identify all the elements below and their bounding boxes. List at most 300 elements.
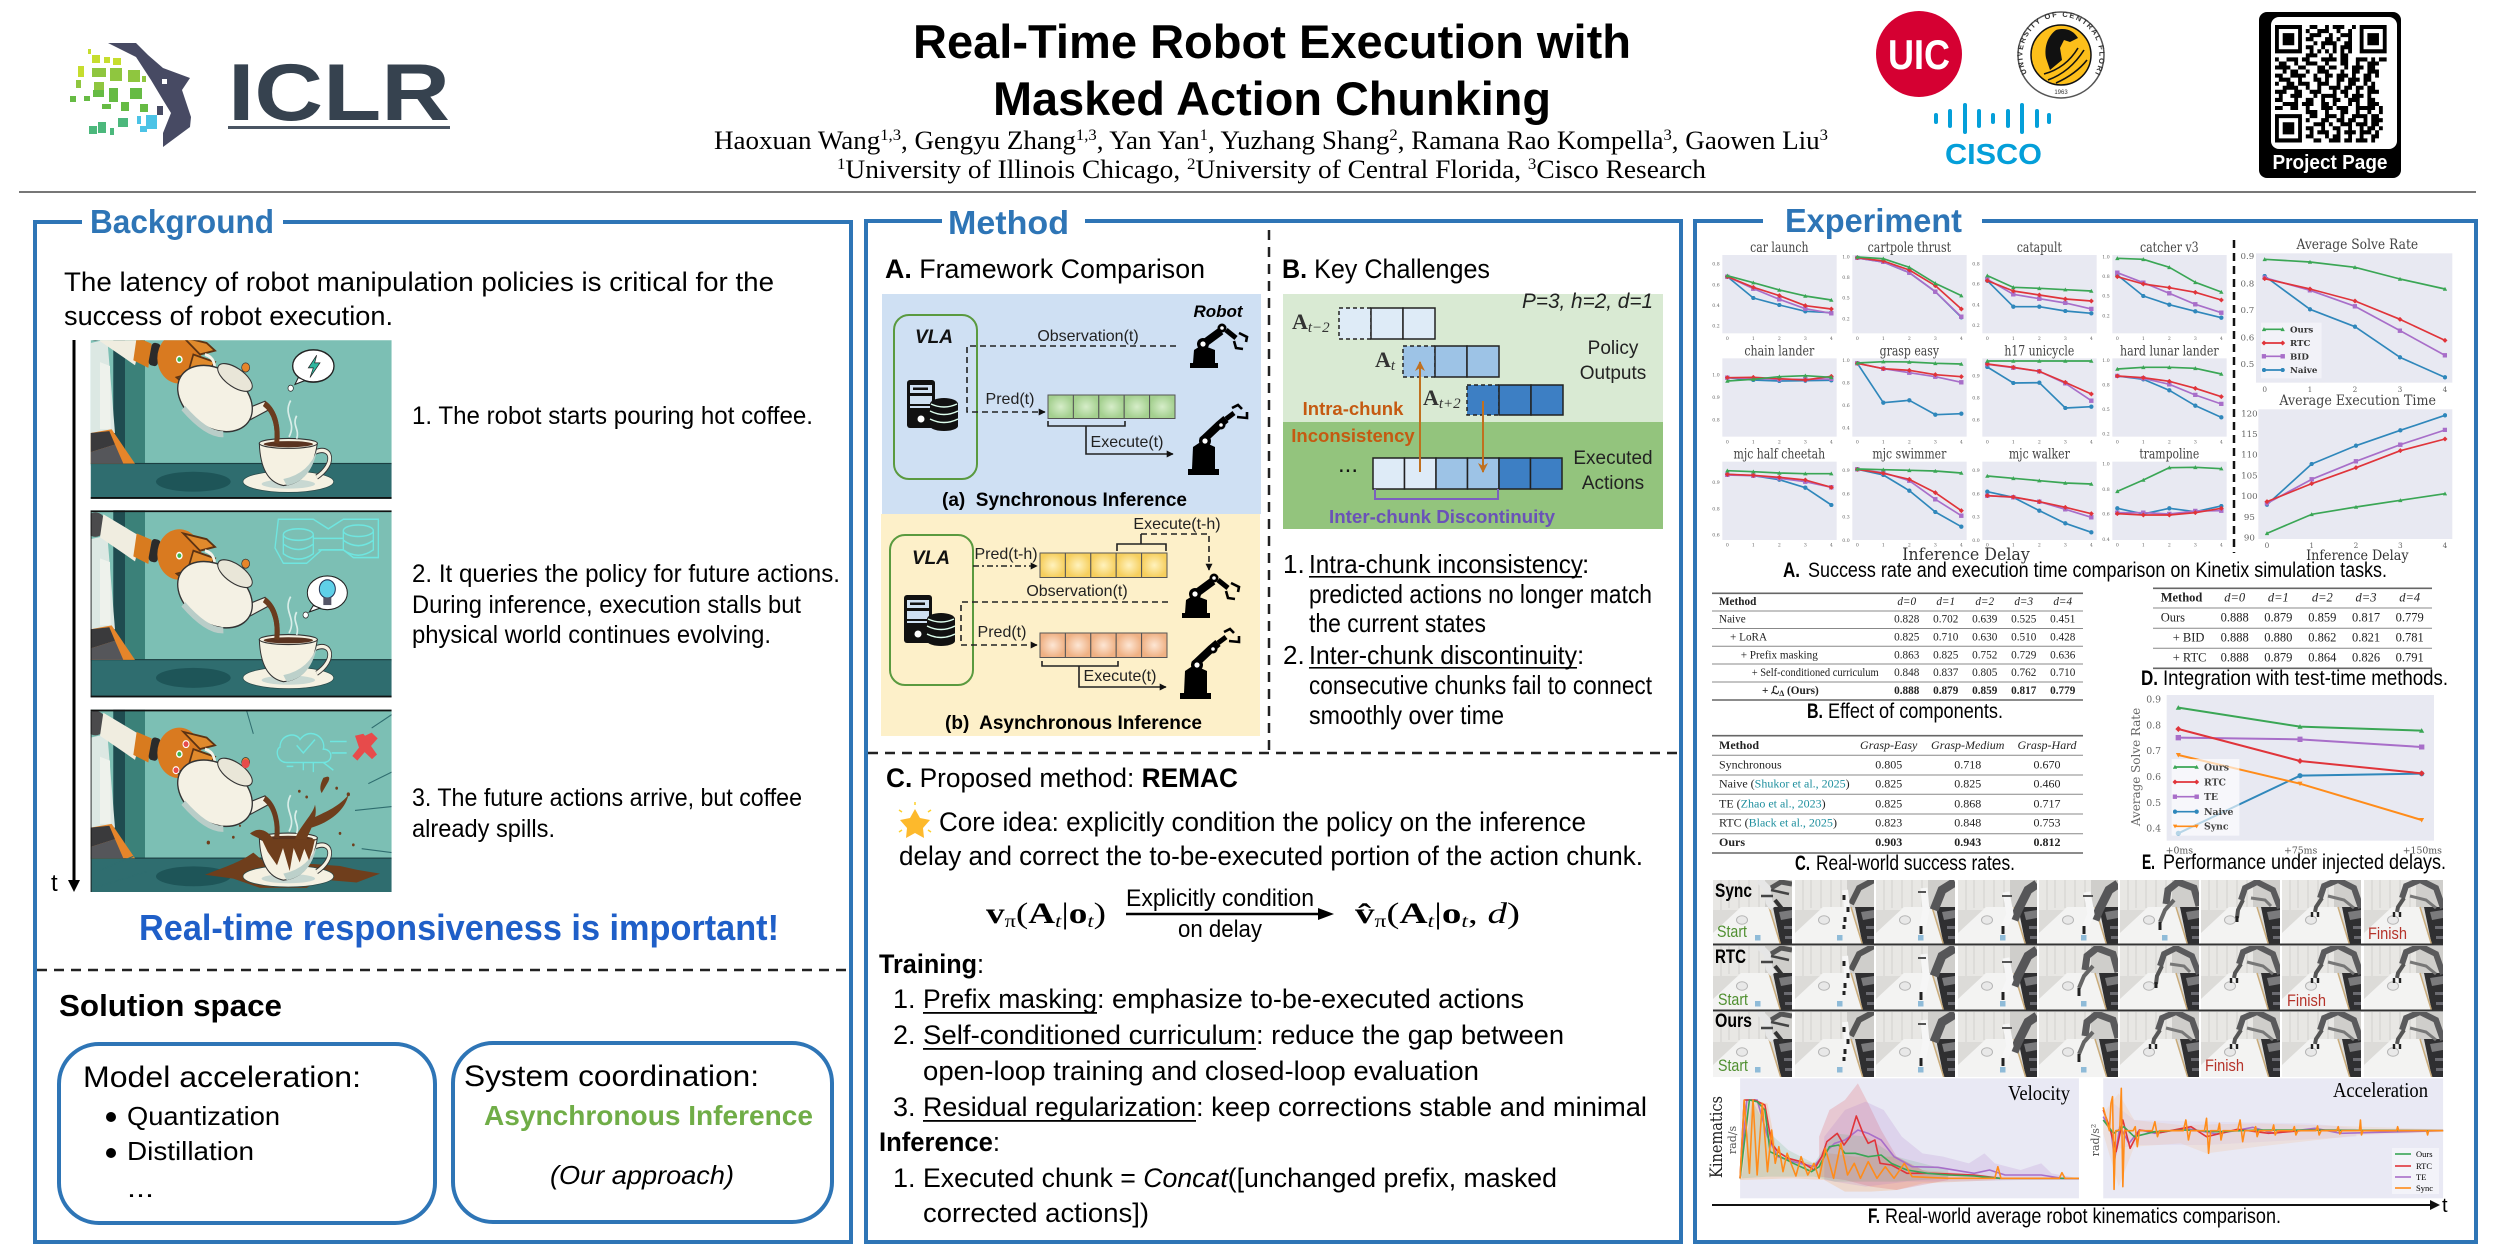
table: real-world success rates: 0.460 xyxy=(2034,777,2060,791)
table: effect of components: 0.837 xyxy=(1933,667,1959,679)
diagram: key challenges: t+2 xyxy=(1439,396,1461,412)
small multiples: Kinetix tasks xyxy=(1712,240,2227,564)
core idea text: delay and correct the to-be-executed portion of the action chunk. xyxy=(899,841,1643,871)
legend xyxy=(2172,759,2239,836)
time axis arrow xyxy=(1712,1195,2448,1217)
table: effect of components: d=2 xyxy=(1975,596,1994,608)
box: Model acceleration: Quantization xyxy=(127,1101,280,1131)
illustrations: coffee pouring sequence xyxy=(85,297,392,897)
formula: delay conditioning xyxy=(986,885,1520,943)
chart: car launch: 0.2 xyxy=(1712,324,1720,330)
chart: performance under injected delays: 0.9 xyxy=(2146,694,2161,705)
list: key challenges: : xyxy=(1577,640,1584,670)
table: effect of components: 0.510 xyxy=(2011,632,2037,644)
intro text: The latency of robot manipulation policies is critical for the xyxy=(64,267,774,297)
chart: mjc half cheetah: 01234 xyxy=(1726,542,1833,548)
ICLR logo: ICLR xyxy=(228,48,450,138)
caption: step 3: already spills. xyxy=(412,815,555,843)
chart: h17 unicycle: 0.8 xyxy=(1972,395,1980,401)
table: integration with test-time methods: d=4 xyxy=(2399,591,2420,605)
chart: mjc half cheetah xyxy=(1712,447,1837,548)
formula: delay conditioning: ( xyxy=(1016,897,1028,930)
chart: performance under injected delays: 0.8 xyxy=(2146,720,2161,731)
diagram: key challenges: t−2 xyxy=(1308,320,1330,336)
box: System coordination xyxy=(453,1043,832,1222)
chart: performance under injected delays: +0ms xyxy=(2166,845,2193,856)
formula: delay conditioning: t xyxy=(1428,911,1435,931)
chart: catcher v3: 0.2 xyxy=(2102,314,2110,320)
chart: velocity: Velocity xyxy=(2008,1081,2070,1105)
legend xyxy=(2392,1148,2439,1194)
diagram: key challenges: Inconsistency xyxy=(1291,425,1415,446)
diagram: key challenges: A xyxy=(1423,385,1439,410)
axis label: Inference Delay: Inference Delay xyxy=(1902,545,2030,564)
diagram: key challenges xyxy=(1283,290,1663,529)
subheading: B. Key Challenges: B. Key Challenges xyxy=(1282,254,1490,284)
diagram: key challenges: Inter-chunk Discontinuity xyxy=(1329,506,1556,527)
training list: 3. xyxy=(893,1092,916,1122)
table: integration with test-time methods: 0.791 xyxy=(2396,651,2424,665)
chart: chain lander: 01234 xyxy=(1726,439,1833,445)
chart: average execution time: 100 xyxy=(2241,492,2258,502)
formula: delay conditioning: o xyxy=(1069,897,1087,930)
box: System coordination: (Our approach) xyxy=(550,1160,734,1190)
legend: BID xyxy=(2290,352,2309,362)
authors and affiliations: 3 xyxy=(1663,127,1672,144)
formula: delay conditioning: o xyxy=(1442,897,1461,930)
legend: Sync xyxy=(2416,1183,2433,1193)
inference list: corrected actions]) xyxy=(923,1198,1149,1228)
training list: open-loop training and closed-loop evaluation xyxy=(923,1056,1479,1086)
diagram: key challenges: Policy xyxy=(1588,338,1639,359)
legend: RTC xyxy=(2204,777,2226,788)
training list: : emphasize to-be-executed actions xyxy=(1097,984,1524,1014)
formula: delay conditioning: v̂ xyxy=(1355,897,1375,930)
axis label: rad/s squared: rad/s² xyxy=(2089,1124,2102,1156)
chart: mjc walker: 0.6 xyxy=(1972,491,1980,497)
chart: mjc swimmer: mjc swimmer xyxy=(1872,447,1947,463)
legend: Naive xyxy=(2290,366,2318,376)
chart: average execution time xyxy=(2241,393,2452,564)
authors and affiliations: University of Illinois Chicago, xyxy=(845,155,1187,184)
chart: average solve rate: Average Solve Rate xyxy=(2296,237,2418,253)
chart: catapult: 0.4 xyxy=(1972,302,1980,308)
chart: mjc walker: 01234 xyxy=(1986,542,2093,548)
legend: TE xyxy=(2204,792,2218,803)
chart: hard lunar lander: 1.0 xyxy=(2102,358,2110,364)
chart: cartpole thrust: 1.0 xyxy=(1842,254,1850,260)
table: integration with test-time methods: 0.879 xyxy=(2264,651,2292,665)
row: RTC xyxy=(1713,946,2443,1012)
intro text: success of robot execution. xyxy=(64,301,393,331)
legend: Naive xyxy=(2204,807,2234,818)
training list: Prefix masking xyxy=(923,984,1097,1014)
diagram: key challenges: A xyxy=(1292,309,1308,334)
table: effect of components: 0.825 xyxy=(1933,649,1959,661)
chart: grasp easy: 1.0 xyxy=(1842,358,1850,364)
caption B: Effect of components. xyxy=(1828,700,2003,723)
authors and affiliations: Cisco Research xyxy=(1536,155,1706,184)
chart: grasp easy: 0.4 xyxy=(1842,425,1850,431)
chart: performance under injected delays: 0.7 xyxy=(2146,746,2161,757)
table: real-world success rates: 0.717 xyxy=(2034,796,2060,810)
chart: trampoline: 1.0 xyxy=(2102,462,2110,468)
caption E: E. xyxy=(2142,851,2155,874)
chart: mjc walker: mjc walker xyxy=(2009,447,2070,463)
chart: cartpole thrust: 0.5 xyxy=(1842,295,1850,301)
row: Ours: Ours xyxy=(1715,1011,1752,1032)
chart: car launch xyxy=(1712,240,1837,342)
chart: grasp easy xyxy=(1842,343,1967,445)
chart: car launch: 0.6 xyxy=(1712,282,1720,288)
table: integration with test-time methods: 0.821 xyxy=(2352,631,2380,645)
formula: delay conditioning: π xyxy=(1005,911,1016,931)
chart: mjc walker: 0.0 xyxy=(1972,538,1980,544)
chart: chain lander xyxy=(1712,343,1837,445)
chart: grasp easy: 01234 xyxy=(1856,439,1963,445)
table: effect of components: 0.636 xyxy=(2050,649,2076,661)
chart: chain lander: chain lander xyxy=(1744,343,1815,359)
chart: mjc swimmer: 0.3 xyxy=(1842,515,1850,521)
list: key challenges: Inter-chunk discontinuity xyxy=(1309,640,1577,670)
chart: acceleration xyxy=(2103,1078,2443,1198)
training list: Residual regularization xyxy=(923,1092,1196,1122)
training list: Self-conditioned curriculum xyxy=(923,1020,1256,1050)
list: key challenges: the current states xyxy=(1309,608,1486,638)
chart: grasp easy: grasp easy xyxy=(1880,343,1939,359)
table: effect of components: 0.828 xyxy=(1894,614,1920,626)
legend: TE xyxy=(2416,1172,2426,1182)
table: real-world success rates: 0.825 xyxy=(1875,796,1902,810)
authors and affiliations: , Gengyu Zhang xyxy=(901,126,1076,155)
list: key challenges: Intra-chunk inconsistency xyxy=(1309,549,1583,579)
authors and affiliations: , Ramana Rao Kompella xyxy=(1398,126,1664,155)
chart: performance under injected delays: +75ms xyxy=(2284,845,2318,856)
table: effect of components: Method xyxy=(1719,596,1757,608)
ICLR logo xyxy=(70,43,450,147)
formula: delay conditioning: ( xyxy=(1386,897,1399,930)
legend: Ours xyxy=(2416,1149,2433,1159)
diagram: synchronous inference xyxy=(882,294,1261,514)
chart: acceleration: Acceleration xyxy=(2333,1078,2428,1102)
table: real-world success rates: 0.848 xyxy=(1954,816,1981,830)
chart: hard lunar lander: 0.5 xyxy=(2102,407,2110,413)
chart: mjc swimmer: 0.6 xyxy=(1842,491,1850,497)
chart: mjc swimmer xyxy=(1842,447,1967,548)
formula: delay conditioning: t xyxy=(1087,911,1095,931)
diagram: asynchronous inference: Execute(t-h) xyxy=(1133,516,1221,533)
chart: mjc half cheetah: 0.9 xyxy=(1712,480,1720,486)
heading: Background: Background xyxy=(90,203,274,240)
axis label: Kinematics: Kinematics xyxy=(1707,1096,1727,1178)
chart: cartpole thrust: 0.8 xyxy=(1842,275,1850,281)
diagram: key challenges: Actions xyxy=(1582,473,1644,494)
chart: average solve rate: 01234 xyxy=(2262,385,2448,394)
table: effect of components: d=0 xyxy=(1897,596,1916,608)
caption: step 1: 1. The robot starts pouring hot coffee. xyxy=(412,402,813,430)
box: Model acceleration xyxy=(59,1044,435,1223)
authors and affiliations: 2 xyxy=(1389,127,1398,144)
table: effect of components: 0.879 xyxy=(1933,685,1959,697)
chart: trampoline: 01234 xyxy=(2116,542,2223,548)
chart: performance under injected delays: +150ms xyxy=(2403,845,2442,856)
caption F: Real-world average robot kinematics comparison. xyxy=(1885,1205,2281,1228)
chart: trampoline xyxy=(2102,447,2227,548)
diagram: synchronous inference: Pred(t) xyxy=(986,391,1034,408)
table: effect of components: d=4 xyxy=(2053,596,2072,608)
table: integration with test-time methods: + RTC xyxy=(2173,651,2206,665)
table: integration with test-time methods: 0.817 xyxy=(2352,611,2380,625)
chart: average execution time: 120 xyxy=(2241,409,2258,419)
chart: hard lunar lander: 0.8 xyxy=(2102,382,2110,388)
chart: catcher v3: 01234 xyxy=(2116,336,2223,342)
chart: h17 unicycle: 0.9 xyxy=(1972,373,1980,379)
caption B: B. xyxy=(1807,700,1823,723)
chart: catapult: 0.2 xyxy=(1972,323,1980,329)
table: real-world success rates: 0.670 xyxy=(2034,757,2060,771)
chart: car launch: 0.4 xyxy=(1712,303,1720,309)
box: Model acceleration: ... xyxy=(127,1173,154,1203)
heading: Method: Method xyxy=(948,204,1069,241)
diagram: synchronous inference: VLA xyxy=(915,327,953,348)
formula: delay conditioning: t xyxy=(1461,911,1469,931)
authors and affiliations: 3 xyxy=(1820,127,1828,144)
table: real-world success rates: 0.825 xyxy=(1875,777,1902,791)
table: effect of components: + Self-conditioned curriculum xyxy=(1752,667,1879,679)
logo: Cisco xyxy=(1934,103,2051,171)
chart: performance under injected delays: Average Solve Rate xyxy=(2129,708,2143,827)
formula: delay conditioning: | xyxy=(1434,897,1442,930)
logo: UIC: UIC xyxy=(1888,31,1950,78)
table: effect of components: 0.428 xyxy=(2050,632,2076,644)
table: integration with test-time methods: 0.864 xyxy=(2308,651,2337,665)
table: effect of components: 0.702 xyxy=(1933,614,1958,626)
table: integration with test-time methods: 0.879 xyxy=(2264,611,2292,625)
row: Ours xyxy=(1713,1011,2443,1078)
chart: catcher v3: 1.0 xyxy=(2102,254,2110,260)
training list: Training: xyxy=(879,949,984,979)
diagram: synchronous inference: Execute(t) xyxy=(1091,434,1163,451)
table: integration with test-time methods: d=2 xyxy=(2312,591,2333,605)
chart: catapult xyxy=(1972,240,2097,342)
authors and affiliations: Haoxuan Wang xyxy=(714,126,874,155)
chart: mjc half cheetah: 0.8 xyxy=(1712,506,1720,512)
chart: cartpole thrust: 01234 xyxy=(1856,336,1963,342)
table: effect of components: d=1 xyxy=(1936,596,1955,608)
diagram: synchronous inference: (a) Synchronous Inference xyxy=(942,490,1187,511)
formula: delay conditioning: A xyxy=(1028,897,1056,930)
authors and affiliations: 1,3 xyxy=(1076,127,1097,144)
table: effect of components: 0.451 xyxy=(2050,614,2075,626)
formula: delay conditioning: on delay xyxy=(1178,916,1262,943)
list: key challenges xyxy=(1283,549,1653,730)
diagram: asynchronous inference: (b) Asynchronous Inference xyxy=(945,713,1202,734)
chart: grasp easy: 0.6 xyxy=(1842,403,1850,409)
caption A: Success rate and execution time comparison on Kinetix simulation tasks. xyxy=(1808,559,2387,582)
table: integration with test-time methods: 0.859 xyxy=(2308,611,2336,625)
table: integration with test-time methods: 0.826 xyxy=(2352,651,2380,665)
caption: step 2 xyxy=(412,560,840,649)
diagram: synchronous inference: Robot xyxy=(1193,302,1244,321)
table: integration with test-time methods: 0.888 xyxy=(2221,611,2249,625)
authors and affiliations: 1 xyxy=(837,156,845,173)
chart: mjc walker: 0.3 xyxy=(1972,515,1980,521)
table: effect of components: 0.817 xyxy=(2011,685,2037,697)
table: real-world success rates: 0.718 xyxy=(1954,757,1981,771)
chart: average solve rate xyxy=(2240,237,2452,394)
box: System coordination: Asynchronous Inference xyxy=(484,1100,813,1131)
table: effect of components: 0.639 xyxy=(1972,614,1998,626)
chart: car launch: car launch xyxy=(1750,240,1808,256)
training list: : reduce the gap between xyxy=(1256,1020,1564,1050)
title: Masked Action Chunking xyxy=(993,72,1551,125)
subheading: A. Framework Comparison: A. Framework Comparison xyxy=(885,254,1205,284)
chart: mjc half cheetah: 0.6 xyxy=(1712,533,1720,539)
row: Sync xyxy=(1713,880,2443,946)
chart: hard lunar lander xyxy=(2102,343,2227,445)
formula: delay conditioning: | xyxy=(1061,897,1069,930)
photo strip: robot rollouts xyxy=(1713,880,2443,1078)
table: real-world success rates: RTC (Black et al., 2025) xyxy=(1719,816,1837,830)
table: effect of components: 0.863 xyxy=(1894,649,1920,661)
table: real-world success rates: Grasp-Medium xyxy=(1931,738,2005,752)
chart: trampoline: 0.6 xyxy=(2102,512,2110,518)
chart: average execution time: Inference Delay xyxy=(2306,548,2409,564)
training list xyxy=(879,949,1647,1122)
training list: 1. xyxy=(893,984,916,1014)
formula: delay conditioning: d) xyxy=(1487,897,1517,930)
table: real-world success rates: Method xyxy=(1719,738,1759,752)
chart: average execution time: Average Execution Time xyxy=(2278,393,2436,409)
caption: step 2: 2. It queries the policy for future actions. xyxy=(412,560,840,588)
chart: chain lander: 0.8 xyxy=(1712,417,1720,423)
table: real-world success rates: 0.903 xyxy=(1875,835,1902,849)
table: effect of components: + ℒ xyxy=(1762,685,1779,697)
table: real-world success rates: 0.943 xyxy=(1954,835,1981,849)
table: integration with test-time methods: + BID xyxy=(2173,631,2204,645)
logo: UCF seal xyxy=(2017,11,2105,99)
subheading: C. Proposed method: C. Proposed method: REMAC xyxy=(886,763,1238,793)
chart: hard lunar lander: 01234 xyxy=(2116,439,2223,445)
legend xyxy=(2261,323,2322,378)
inference list xyxy=(879,1127,1557,1228)
table: effect of components: 0.859 xyxy=(1972,685,1998,697)
chart: chain lander: 0.9 xyxy=(1712,395,1720,401)
chart: performance under injected delays: 0.5 xyxy=(2146,798,2161,809)
row: RTC: RTC xyxy=(1715,947,1746,968)
chart: average solve rate: 0.8 xyxy=(2240,279,2254,289)
QR code: project page xyxy=(2259,12,2401,178)
list: key challenges: 1. xyxy=(1283,549,1305,579)
chart: mjc swimmer: 01234 xyxy=(1856,542,1963,548)
table: real-world success rates: 0.753 xyxy=(2034,816,2060,830)
chart: hard lunar lander: 0.2 xyxy=(2102,431,2110,437)
table: effect of components: 0.752 xyxy=(1972,649,1997,661)
diagram: key challenges: Outputs xyxy=(1580,363,1646,384)
chart: car launch: 0.8 xyxy=(1712,262,1720,268)
QR code: project page: Project Page xyxy=(2272,152,2388,174)
caption: step 2: physical world continues evolving. xyxy=(412,621,771,649)
row: RTC: Start xyxy=(1718,990,1748,1009)
table: effect of components: 0.525 xyxy=(2011,614,2037,626)
table: integration with test-time methods: d=0 xyxy=(2224,591,2246,605)
table: real-world success rates: 0.868 xyxy=(1954,796,1981,810)
chart: cartpole thrust xyxy=(1842,240,1967,342)
table: integration with test-time methods: 0.862 xyxy=(2308,631,2336,645)
time axis arrow: t xyxy=(2442,1195,2448,1217)
row: Ours: Start xyxy=(1718,1056,1748,1075)
legend: Ours xyxy=(2204,762,2229,773)
table: real-world success rates xyxy=(1712,736,2083,853)
table: real-world success rates: Synchronous xyxy=(1719,757,1782,771)
chart: average execution time: 110 xyxy=(2241,451,2258,461)
intro text xyxy=(64,267,774,331)
table: real-world success rates: 0.805 xyxy=(1875,757,1902,771)
diagram: asynchronous inference: Execute(t) xyxy=(1084,668,1156,685)
box: System coordination: System coordination: xyxy=(464,1060,759,1093)
table: effect of components: Naive xyxy=(1719,614,1746,626)
authors and affiliations: , Gaowen Liu xyxy=(1672,126,1820,155)
axis label: rad/s: rad/s xyxy=(1726,1126,1739,1154)
chart: catcher v3: catcher v3 xyxy=(2140,240,2199,256)
panel: Method xyxy=(866,204,1681,1242)
panel: Background xyxy=(35,203,851,1242)
table: effect of components: + LoRA xyxy=(1730,632,1767,644)
table: integration with test-time methods: 0.779 xyxy=(2396,611,2424,625)
chart: catcher v3 xyxy=(2102,240,2227,342)
table: effect of components: 0.630 xyxy=(1972,632,1998,644)
chart: average execution time: 01234 xyxy=(2265,541,2448,550)
legend: RTC xyxy=(2290,339,2310,349)
caption A: A. xyxy=(1783,559,1800,582)
box: Model acceleration: Distillation xyxy=(127,1136,254,1166)
table: effect of components: (Ours) xyxy=(1784,685,1819,697)
list: key challenges: 2. xyxy=(1283,640,1305,670)
authors and affiliations: 2 xyxy=(1187,156,1195,173)
table: effect of components: 0.779 xyxy=(2050,685,2076,697)
diagram: key challenges: t xyxy=(1391,358,1396,374)
row: Sync: Finish xyxy=(2368,924,2407,943)
caption D: D. xyxy=(2141,667,2158,690)
diagram: asynchronous inference xyxy=(881,514,1260,736)
caption: step 2: During inference, execution stalls but xyxy=(412,591,801,619)
panel: Experiment xyxy=(1695,202,2476,1242)
caption C: Real-world success rates. xyxy=(1816,852,2015,875)
logo: UIC xyxy=(1876,11,1962,97)
table: integration with test-time methods: 0.888 xyxy=(2221,651,2249,665)
row: Ours: Finish xyxy=(2205,1056,2244,1075)
authors and affiliations: University of Central Florida, xyxy=(1195,155,1528,184)
table: effect of components: 0.729 xyxy=(2011,649,2037,661)
chart: h17 unicycle: h17 unicycle xyxy=(2004,343,2074,359)
row: RTC: Finish xyxy=(2287,991,2326,1010)
formula: delay conditioning: ) xyxy=(1094,897,1106,930)
legend: RTC xyxy=(2416,1161,2432,1171)
list: key challenges: smoothly over time xyxy=(1309,700,1504,730)
table: effect of components: 0.805 xyxy=(1972,667,1998,679)
chart: catcher v3: 0.5 xyxy=(2102,294,2110,300)
list: key challenges: : xyxy=(1582,549,1589,579)
image: coffee spills xyxy=(90,710,392,892)
table: real-world success rates: 0.823 xyxy=(1875,816,1902,830)
list: key challenges: predicted actions no longer match xyxy=(1309,579,1652,609)
chart: h17 unicycle: 0.6 xyxy=(1972,417,1980,423)
authors and affiliations xyxy=(714,126,1828,184)
table: integration with test-time methods xyxy=(2153,588,2432,668)
chart: grasp easy: 0.8 xyxy=(1842,381,1850,387)
chart: performance under injected delays: 0.6 xyxy=(2146,772,2161,783)
chart: mjc walker: 0.9 xyxy=(1972,468,1980,474)
